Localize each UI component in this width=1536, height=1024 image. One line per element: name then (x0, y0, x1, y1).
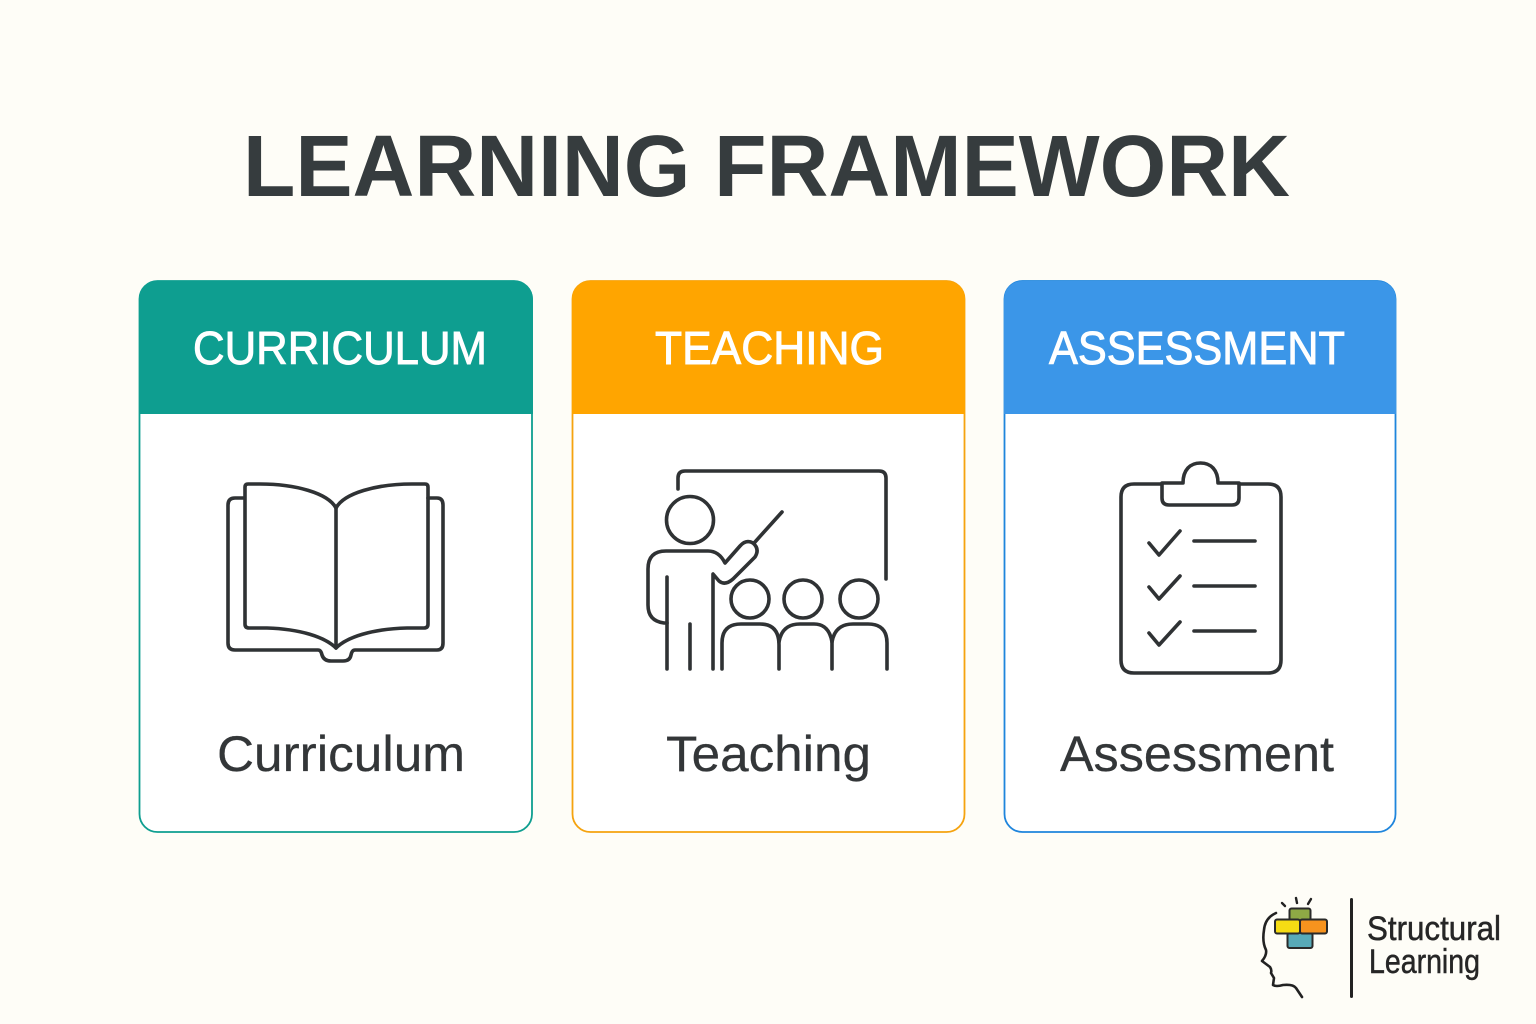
curriculum heading: CURRICULUM (193, 322, 487, 374)
assessment label: Assessment (1060, 726, 1334, 782)
icon: open book (228, 484, 443, 661)
curriculum header band (139, 281, 533, 414)
curriculum label: Curriculum (217, 726, 465, 782)
logo wordmark: Learning (1369, 943, 1480, 981)
title: LEARNING FRAMEWORK (243, 118, 1290, 215)
logo icon: head with blocks (1262, 898, 1327, 997)
icon: clipboard checklist (1121, 463, 1281, 673)
assessment heading: ASSESSMENT (1049, 322, 1345, 374)
teaching heading: TEACHING (655, 322, 884, 374)
panel: curriculum (139, 281, 533, 832)
logo: Structural Learning (1262, 898, 1501, 998)
teaching header band (572, 281, 965, 414)
logo wordmark (1367, 910, 1501, 981)
logo wordmark: Structural (1367, 910, 1501, 948)
panel: assessment (1004, 281, 1396, 832)
logo divider (1350, 898, 1353, 998)
assessment header band (1004, 281, 1396, 414)
teaching label: Teaching (666, 726, 871, 782)
panel: teaching (572, 281, 965, 832)
icon: teacher and students (648, 471, 887, 669)
